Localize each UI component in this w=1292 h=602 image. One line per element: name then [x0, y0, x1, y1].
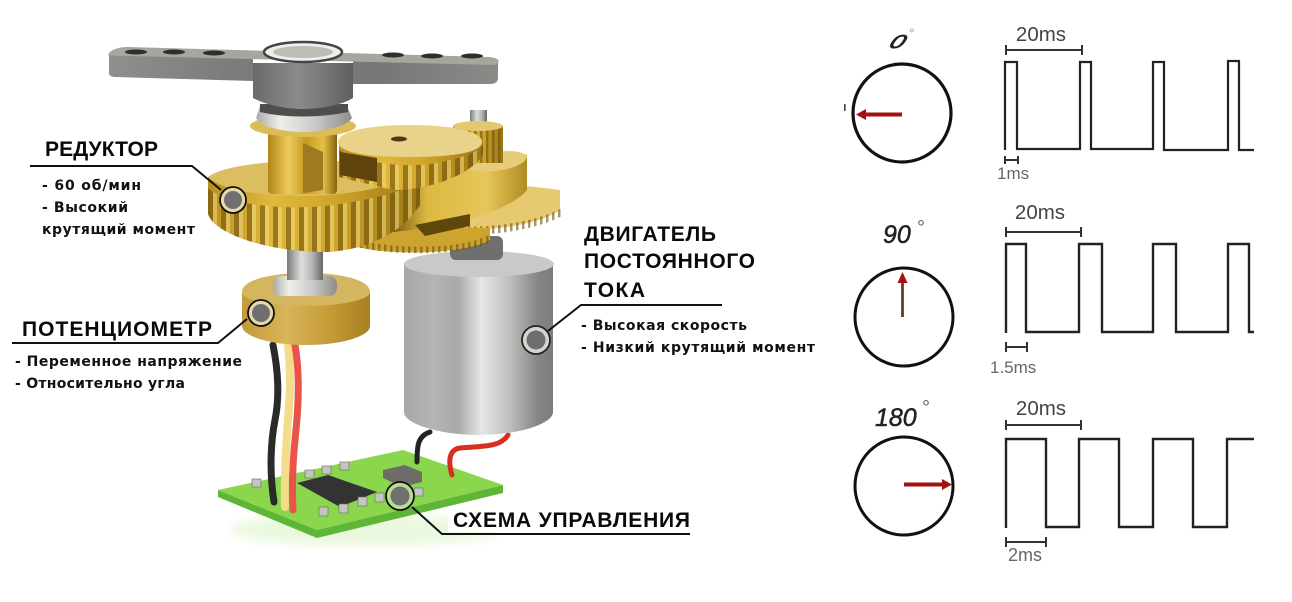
- heading: gearbox: РЕДУКТОР: [45, 138, 158, 161]
- pulse chart: 1.5 ms: [990, 201, 1254, 377]
- motor wires: [417, 432, 508, 475]
- text: potentiometer specs: [15, 354, 242, 392]
- callout: control circuit: [386, 482, 694, 534]
- period label: 20 ms: 20ms: [1016, 397, 1066, 420]
- text: DC motor specs: [581, 318, 816, 356]
- label: 0 degrees: °: [909, 25, 915, 41]
- circuit board: [218, 450, 503, 546]
- servo arm: [108, 42, 499, 132]
- width label: 1.5 ms: 1.5ms: [990, 358, 1036, 377]
- dial: 90 degrees: [855, 217, 953, 366]
- label: 180 degrees: [875, 397, 930, 432]
- width bar: 1.5 ms: [1006, 342, 1027, 352]
- period bar: 20 ms: [1006, 420, 1081, 430]
- period bar: 20 ms: [1006, 227, 1081, 237]
- heading: DC motor: ДВИГАТЕЛЬ: [584, 223, 716, 246]
- potentiometer: [242, 248, 370, 345]
- gear: upper middle: [338, 125, 483, 190]
- text: DC motor specs: - Высокая скорость: [581, 318, 747, 334]
- arrow: 90 degrees: [898, 272, 908, 317]
- marker: potentiometer: [248, 300, 274, 326]
- gear: lower thin: [353, 228, 490, 253]
- callout: potentiometer: [12, 300, 274, 392]
- pulse chart: 2 ms: [1006, 397, 1254, 565]
- DC motor: [404, 236, 554, 435]
- heading: control circuit: СХЕМА УПРАВЛЕНИЯ: [453, 509, 690, 532]
- width bar: 2 ms: [1006, 537, 1046, 547]
- servo illustration: [108, 42, 562, 546]
- callout: gearbox: [30, 138, 246, 238]
- pulse chart: 1 ms: [997, 23, 1254, 183]
- period label: 20 ms: 20ms: [1015, 201, 1065, 224]
- gear: main large: [208, 161, 420, 252]
- period label: 20 ms: 20ms: [1016, 23, 1066, 46]
- heading: DC motor: ТОКА: [584, 279, 645, 302]
- gear: right bronze: [393, 151, 527, 236]
- text: potentiometer specs: - Относительно угла: [15, 376, 185, 392]
- heading: DC motor: [584, 223, 755, 302]
- arrow: 0 degrees: [856, 109, 902, 120]
- text: gearbox specs: крутящий момент: [42, 222, 196, 238]
- dial: 180 degrees: [855, 397, 953, 535]
- label: 0 degrees: [886, 25, 915, 52]
- label: 90 degrees: °: [917, 217, 925, 239]
- label: 180 degrees: °: [922, 397, 930, 419]
- label: 90 degrees: 90: [883, 221, 911, 249]
- potentiometer wires: [271, 345, 298, 510]
- gold flange and neck: [250, 115, 356, 194]
- period bar: 20 ms: [1006, 45, 1082, 55]
- heading: potentiometer: ПОТЕНЦИОМЕТР: [22, 318, 212, 341]
- marker: control circuit: [386, 482, 414, 510]
- width label: 1 ms: 1ms: [997, 164, 1029, 183]
- width bar: 1 ms: [1005, 156, 1018, 164]
- heading: DC motor: ПОСТОЯННОГО: [584, 250, 755, 273]
- marker: DC motor: [522, 326, 550, 354]
- dial: 0 degrees: [844, 25, 951, 162]
- marker: gearbox: [220, 187, 246, 213]
- text: DC motor specs: - Низкий крутящий момент: [581, 340, 816, 356]
- text: potentiometer specs: - Переменное напряжение: [15, 354, 242, 370]
- label: 0 degrees: 0: [886, 31, 910, 52]
- width label: 2 ms: 2ms: [1008, 545, 1042, 565]
- text: gearbox specs: - 60 об/мин: [42, 178, 141, 194]
- reduction gears: [208, 110, 562, 253]
- gear: large thin rear: [400, 185, 562, 235]
- text: gearbox specs: [42, 178, 196, 238]
- arrow: 180 degrees: [904, 479, 952, 490]
- label: 90 degrees: [883, 217, 925, 249]
- text: gearbox specs: - Высокий: [42, 200, 128, 216]
- label: 180 degrees: 180: [875, 404, 917, 432]
- gear: small top with pin: [453, 110, 503, 163]
- callout: DC motor: [522, 223, 816, 356]
